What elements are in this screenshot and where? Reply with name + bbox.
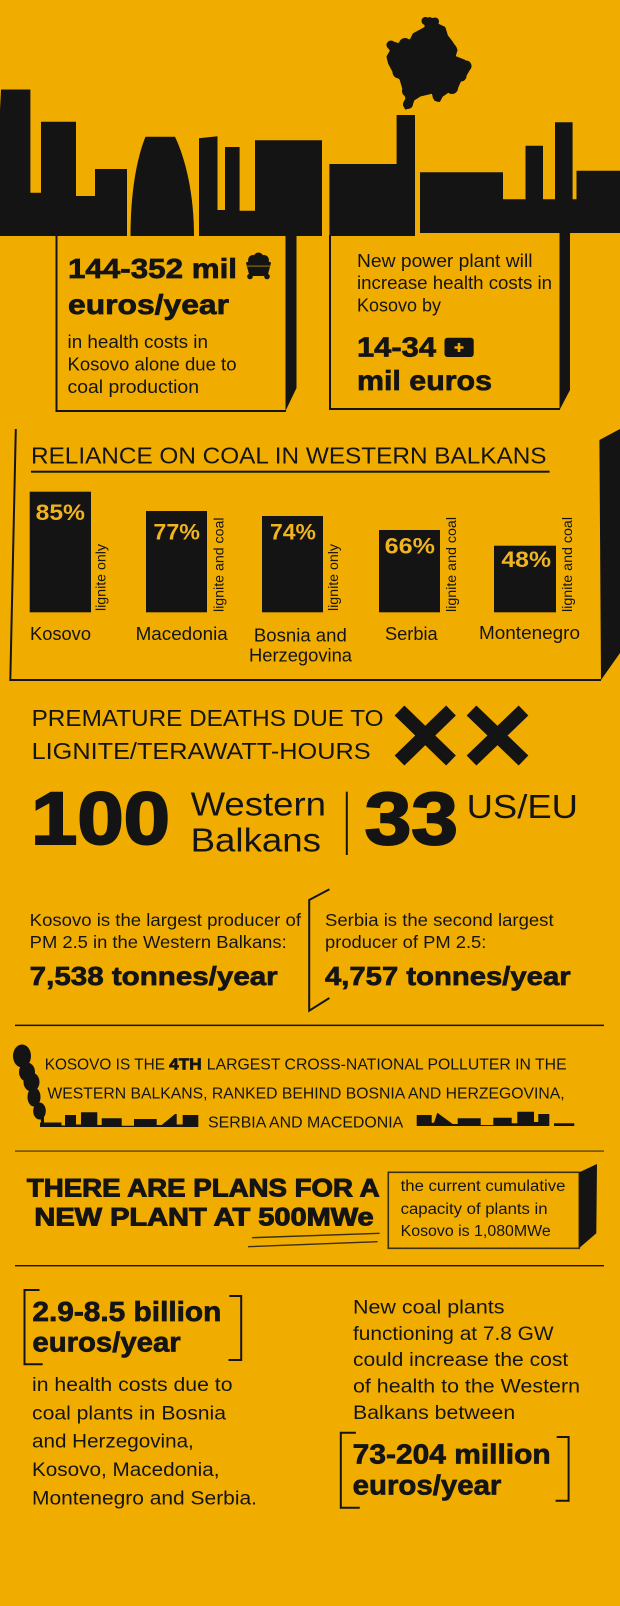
callout: current capacity: the current cumulative	[401, 1178, 565, 1195]
callout: health costs of coal production: euros/year	[68, 289, 229, 320]
callout: current capacity	[388, 1164, 597, 1248]
bar: Serbia: Serbia	[385, 624, 439, 644]
bar: Bosnia and Herzegovina: Herzegovina	[249, 646, 353, 666]
section: new coal plants cost: Balkans between	[353, 1402, 515, 1424]
callout: new power plant health costs: 14-34	[357, 332, 437, 362]
skyline illustration	[0, 17, 620, 236]
stat: US/EU: US/EU	[467, 788, 578, 825]
chimney building	[329, 115, 415, 236]
heading	[32, 705, 384, 764]
section: cross-national polluter	[13, 1044, 574, 1131]
bar: Bosnia and Herzegovina: Bosnia and	[254, 626, 347, 646]
section: new coal plants cost: New coal plants	[353, 1296, 505, 1318]
bar: Bosnia and Herzegovina: 74%	[270, 519, 316, 544]
icon: smoke plume	[13, 1044, 46, 1124]
bar chart	[30, 492, 580, 666]
bar: Bosnia and Herzegovina: lignite only	[326, 544, 341, 611]
stat: Western Balkans: Western	[191, 786, 326, 823]
callout: new power plant health costs	[330, 233, 570, 410]
heading: PREMATURE DEATHS DUE TO	[32, 705, 384, 731]
bar: Montenegro: 48%	[501, 547, 551, 572]
section: health costs of coal plants: coal plants in Bosnia	[32, 1402, 226, 1424]
Serbia PM 2.5: 4,757 tonnes/year	[325, 961, 571, 991]
callout: health costs of coal production: in health costs in	[68, 331, 208, 352]
Serbia PM 2.5: Serbia is the second largest	[325, 910, 554, 930]
icon: medical plus	[444, 338, 474, 357]
callout: new power plant health costs: mil euros	[357, 365, 492, 396]
section: new coal plants cost: could increase the cost	[353, 1349, 569, 1371]
section: cross-national polluter: KOSOVO IS THE	[45, 1056, 165, 1073]
section: new coal plants cost: 73-204 million	[353, 1439, 551, 1470]
stat: Western Balkans: 100	[31, 777, 170, 860]
section: health costs of coal plants: Montenegro and Serbia.	[32, 1487, 257, 1509]
bar: Serbia	[379, 517, 459, 644]
smoke shaped as Kosovo map	[386, 17, 472, 109]
section: health costs of coal plants: in health costs due to	[32, 1374, 233, 1396]
bar: Montenegro	[479, 517, 580, 643]
bar: Montenegro: lignite and coal	[560, 517, 575, 612]
bar: Macedonia	[136, 511, 229, 644]
section: health costs of coal plants: 2.9-8.5 billion	[32, 1296, 221, 1327]
stat: Western Balkans: Balkans	[191, 822, 321, 859]
stat: US/EU: 33	[365, 777, 458, 860]
callout: health costs of coal production: 144-352 mil	[68, 253, 237, 284]
Kosovo PM 2.5: 7,538 tonnes/year	[30, 961, 278, 991]
stat: Western Balkans	[31, 777, 326, 860]
section: premature deaths	[31, 705, 578, 860]
cooling tower	[130, 137, 194, 236]
heading: LIGNITE/TERAWATT-HOURS	[32, 738, 371, 764]
callout: health costs of coal production: coal production	[68, 376, 199, 397]
callout: new power plant health costs: New power plant will	[357, 250, 532, 271]
headline	[27, 1175, 380, 1247]
callout: current capacity: capacity of plants in	[401, 1201, 548, 1218]
Serbia PM 2.5	[325, 910, 571, 991]
section: PM 2.5 producers	[30, 889, 571, 1011]
callout: current capacity: Kosovo is 1,080MWe	[401, 1223, 551, 1240]
building group 3	[420, 122, 620, 233]
Kosovo PM 2.5: PM 2.5 in the Western Balkans:	[30, 932, 287, 952]
headline: NEW PLANT AT 500MWe	[34, 1204, 374, 1232]
Serbia PM 2.5: producer of PM 2.5:	[325, 932, 486, 952]
section: new coal plants cost: of health to the Western	[353, 1375, 580, 1397]
bar: Kosovo	[30, 492, 109, 644]
section: health costs of coal plants	[24, 1290, 257, 1509]
section: cross-national polluter: SERBIA AND MACEDONIA	[208, 1114, 404, 1131]
heading: RELIANCE ON COAL IN WESTERN BALKANS	[31, 442, 546, 468]
icon: two crosses	[400, 710, 524, 760]
callout: health costs of coal production	[56, 236, 296, 411]
section: new coal plants cost	[341, 1296, 580, 1508]
callout: health costs of coal production: Kosovo alone due to	[68, 354, 236, 374]
bar: Montenegro: Montenegro	[479, 623, 580, 643]
section: cross-national polluter: 4TH	[169, 1056, 202, 1073]
icon: mini skyline left	[40, 1112, 198, 1127]
bar: Serbia: lignite and coal	[444, 517, 459, 612]
section: new coal plants cost: euros/year	[353, 1469, 502, 1500]
bar: Macedonia: 77%	[153, 519, 200, 544]
bar: Kosovo: lignite only	[94, 544, 109, 611]
icon: coal cart	[246, 252, 271, 279]
bar: Macedonia: lignite and coal	[211, 518, 226, 612]
section: health costs of coal plants: euros/year	[32, 1327, 181, 1358]
bar: Serbia: 66%	[385, 533, 435, 558]
callout: new power plant health costs: increase health costs in	[357, 272, 552, 293]
bar: Kosovo: 85%	[36, 500, 85, 525]
building group 2	[199, 136, 322, 236]
bar: Kosovo: Kosovo	[30, 624, 91, 644]
building group 1	[0, 90, 127, 236]
stat: US/EU	[365, 777, 578, 860]
bar: Macedonia: Macedonia	[136, 624, 229, 644]
Kosovo PM 2.5: Kosovo is the largest producer of	[30, 910, 301, 930]
section: new coal plants cost: functioning at 7.8 GW	[353, 1323, 554, 1345]
headline: THERE ARE PLANS FOR A	[27, 1175, 380, 1203]
section: health costs of coal plants: Kosovo, Macedonia,	[32, 1459, 220, 1481]
section: new plant plans	[27, 1164, 597, 1248]
section: health costs of coal plants: and Herzegovina,	[32, 1431, 194, 1453]
icon: mini skyline right	[417, 1112, 574, 1126]
panel: reliance on coal	[10, 429, 620, 680]
section: cross-national polluter: WESTERN BALKANS, RANKED BEHIND BOSNIA AND HERZEGOVINA,	[47, 1085, 565, 1102]
callout: new power plant health costs: Kosovo by	[357, 294, 442, 316]
bar: Bosnia and Herzegovina	[249, 516, 353, 666]
Kosovo PM 2.5	[30, 910, 301, 991]
section: cross-national polluter: LARGEST CROSS-NATIONAL POLLUTER IN THE	[207, 1056, 567, 1073]
